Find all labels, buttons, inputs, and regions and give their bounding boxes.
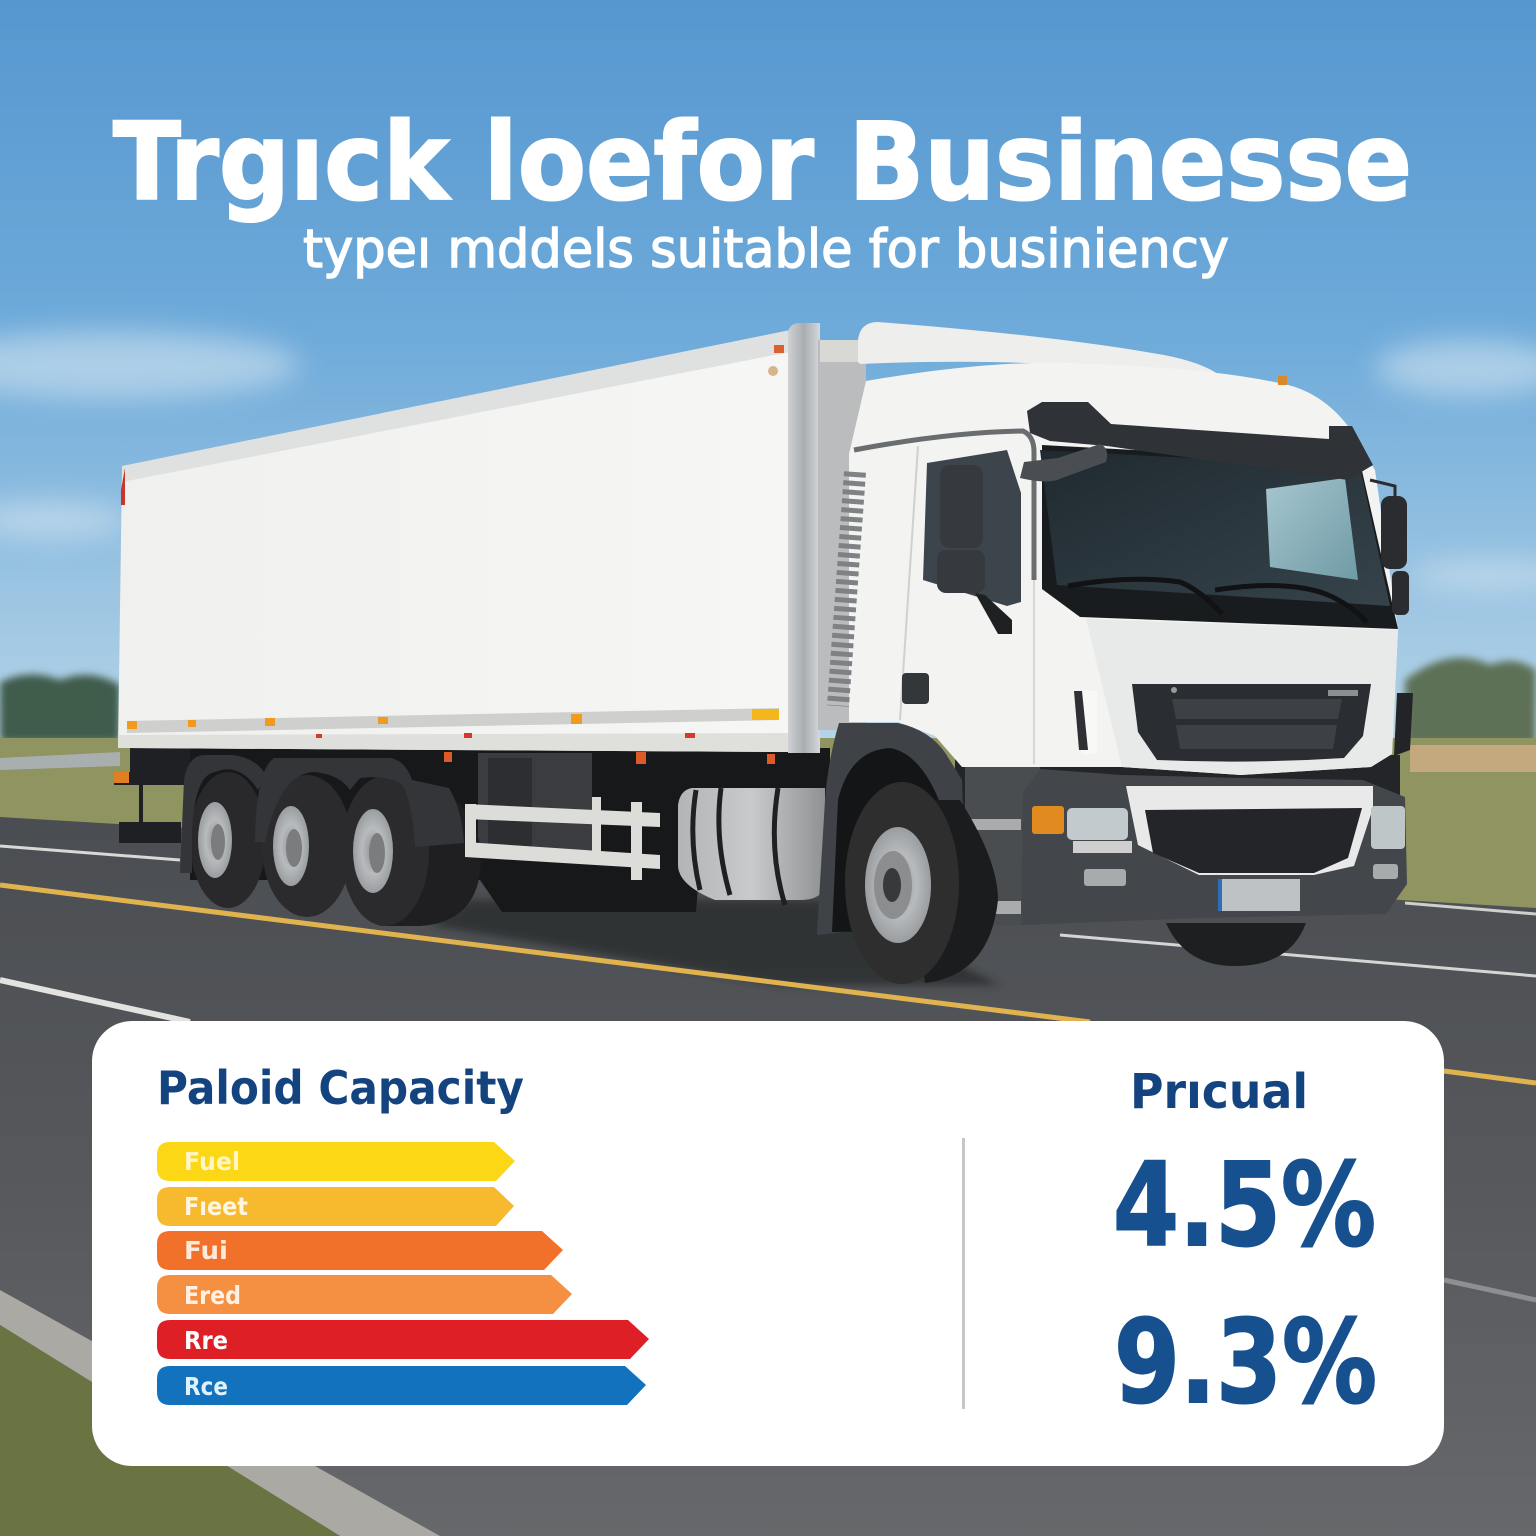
title: Trgıck loefor Businesse xyxy=(113,101,1412,225)
bar: Rce: Rce xyxy=(184,1372,228,1401)
door window xyxy=(923,450,1021,606)
bar: Rre xyxy=(157,1320,649,1359)
sun visor xyxy=(1027,402,1373,480)
truck shadow xyxy=(430,900,1000,985)
front axle tyre under bumper xyxy=(1166,923,1306,966)
grille xyxy=(1132,684,1371,762)
mudguards xyxy=(180,755,464,873)
panel: payload and price xyxy=(92,1021,1444,1466)
roof fairing xyxy=(858,322,1218,374)
background: clouds xyxy=(0,331,1536,589)
heading: payload capacity: Paloid Capacity xyxy=(157,1061,524,1115)
bar: Fleet xyxy=(157,1187,514,1226)
bar: Fleet: Fıeet xyxy=(184,1192,248,1221)
cargo box xyxy=(118,330,790,752)
bar: Ered: Ered xyxy=(184,1281,241,1310)
heading: price: Prıcual xyxy=(1130,1064,1308,1120)
side vents xyxy=(1074,691,1413,756)
subtitle: typeı mddels suitable for businiency xyxy=(303,219,1229,280)
side guard rails xyxy=(465,797,660,880)
left mirrors xyxy=(937,444,1107,634)
fuel tank xyxy=(678,788,825,905)
bar: Fuel orange: Fui xyxy=(184,1236,228,1265)
divider xyxy=(962,1138,965,1409)
roof marker light xyxy=(1278,376,1287,385)
background: sky xyxy=(0,0,1536,760)
front wheel xyxy=(845,782,998,984)
side louvres xyxy=(838,472,855,706)
background: road xyxy=(0,817,1536,1536)
reflector strip xyxy=(127,708,779,733)
bar: Rre: Rre xyxy=(184,1326,228,1355)
wheel 2 xyxy=(262,775,352,917)
right mirrors xyxy=(1370,480,1409,615)
wheel 3 xyxy=(341,776,481,926)
windshield xyxy=(1040,445,1398,629)
wheel 1 xyxy=(190,772,266,908)
truck xyxy=(114,322,1413,984)
silver corner post xyxy=(788,323,820,753)
bar: Fuel: Fuel xyxy=(184,1147,240,1176)
cab body xyxy=(849,363,1398,775)
bar: Rce xyxy=(157,1366,646,1405)
bumper xyxy=(1021,769,1407,925)
stat: 4.5%: 4.5% xyxy=(1113,1139,1376,1273)
underbody behind cab xyxy=(955,755,1400,815)
panel background xyxy=(92,1021,1444,1466)
front wheel arch and steps xyxy=(817,723,1040,935)
gap panel between box and cab xyxy=(818,340,866,730)
rear chassis bracket xyxy=(114,748,230,843)
bar: Fuel xyxy=(157,1142,515,1181)
background: tree lines xyxy=(0,658,1536,745)
rear wheels xyxy=(180,755,481,926)
bar: Ered xyxy=(157,1275,572,1314)
road markings xyxy=(0,846,1536,1300)
roadside curb and grass xyxy=(0,1290,440,1536)
chassis underside xyxy=(190,748,830,912)
door handle xyxy=(902,673,929,704)
rear clearance light xyxy=(820,340,858,362)
bar: Fuel orange xyxy=(157,1231,563,1270)
background: fields xyxy=(0,738,1536,918)
bar chart: arrow bars xyxy=(157,1142,649,1405)
stat: 9.3%: 9.3% xyxy=(1114,1296,1377,1430)
